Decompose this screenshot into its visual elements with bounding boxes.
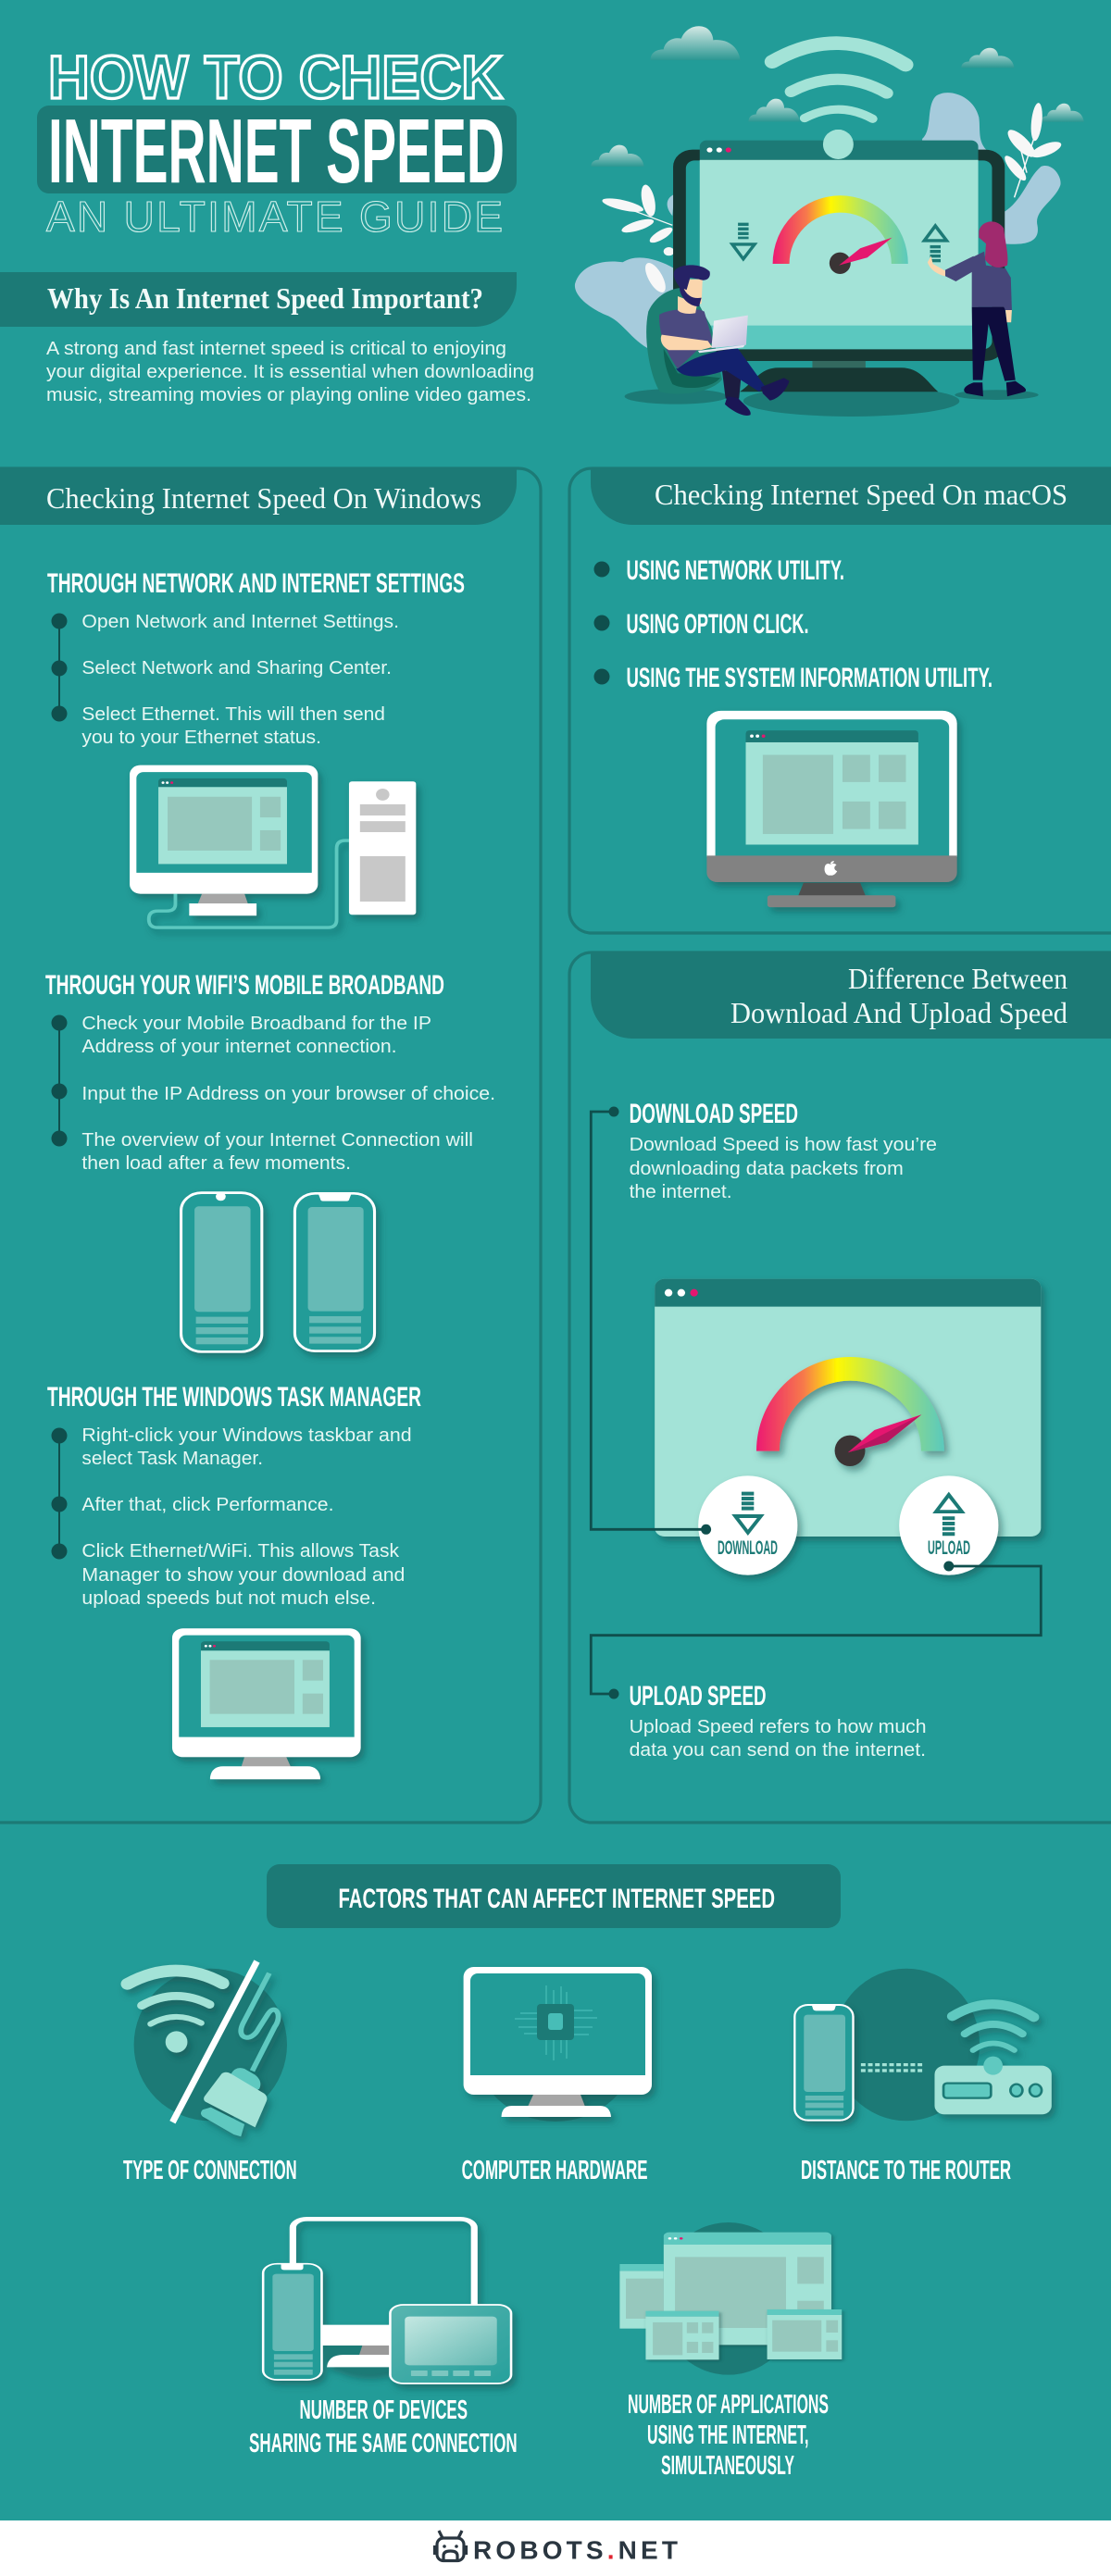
method 1 steps bbox=[81, 611, 399, 748]
footer bar bbox=[0, 2520, 1111, 2576]
upload arrow bbox=[932, 1492, 966, 1536]
method 2 steps: Address of your internet connection. bbox=[81, 1036, 397, 1057]
panel heading: Checking Internet Speed On Windows bbox=[46, 481, 481, 515]
label: TYPE OF CONNECTION bbox=[123, 2156, 297, 2185]
method 2 steps: Check your Mobile Broadband for the IP bbox=[81, 1013, 431, 1034]
logo wordmark: ROBOTS.NET bbox=[473, 2536, 678, 2564]
man with laptop bbox=[646, 265, 790, 416]
method 3 heading: THROUGH THE WINDOWS TASK MANAGER bbox=[47, 1382, 421, 1412]
label: COMPUTER HARDWARE bbox=[462, 2156, 648, 2185]
icon: stacked app windows bbox=[619, 2222, 842, 2375]
upload speed text: Upload Speed refers to how much bbox=[630, 1716, 927, 1737]
panel: checking speed on windows bbox=[0, 468, 541, 1823]
title bbox=[37, 43, 517, 241]
panel header band bbox=[0, 468, 517, 525]
download badge bbox=[698, 1475, 797, 1575]
ground shadows bbox=[625, 386, 1039, 417]
clouds bbox=[591, 26, 1084, 167]
method 3 steps: upload speeds but not much else. bbox=[81, 1587, 376, 1609]
intro paragraph: your digital experience. It is essential when downloading bbox=[46, 361, 534, 382]
icon: wifi versus cable bbox=[128, 1961, 287, 2136]
download speed heading: DOWNLOAD SPEED bbox=[630, 1099, 798, 1129]
download speed text: Download Speed is how fast you’re bbox=[630, 1134, 937, 1155]
intro paragraph: A strong and fast internet speed is critical to enjoying bbox=[46, 338, 506, 359]
macos methods list: USING OPTION CLICK. bbox=[626, 609, 809, 640]
method 1 timeline dots bbox=[52, 613, 67, 722]
speed gauge bbox=[773, 195, 908, 274]
title pill bbox=[37, 106, 517, 193]
label: NUMBER OF DEVICES bbox=[300, 2396, 468, 2425]
label: USING THE INTERNET, bbox=[647, 2420, 809, 2450]
speed gauge bbox=[756, 1357, 944, 1466]
panel: checking speed on macos bbox=[569, 468, 1111, 933]
wifi symbol bbox=[772, 44, 905, 159]
upload label: UPLOAD bbox=[928, 1537, 970, 1559]
method 1 heading: THROUGH NETWORK AND INTERNET SETTINGS bbox=[47, 568, 465, 599]
method 1 steps: you to your Ethernet status. bbox=[81, 727, 321, 748]
monitor bbox=[673, 130, 1005, 392]
upload speed text: data you can send on the internet. bbox=[630, 1739, 926, 1761]
heading text: Why Is An Internet Speed Important? bbox=[47, 281, 483, 315]
icon: robot logo bbox=[435, 2531, 467, 2561]
label: SIMULTANEOUSLY bbox=[661, 2451, 794, 2481]
factor: distance to the router bbox=[794, 1969, 1052, 2185]
upload speed text bbox=[630, 1716, 927, 1761]
woman pointing at gauge bbox=[928, 221, 1026, 396]
connector: download bbox=[591, 1107, 711, 1535]
download speed text: the internet. bbox=[630, 1181, 732, 1202]
macos methods list: USING NETWORK UTILITY. bbox=[626, 555, 844, 586]
blue foliage bbox=[575, 93, 1061, 350]
method 2 timeline dots bbox=[52, 1014, 67, 1146]
intro paragraph: music, streaming movies or playing online video games. bbox=[46, 384, 531, 405]
download arrow icon bbox=[730, 223, 758, 262]
upload speed heading: UPLOAD SPEED bbox=[630, 1681, 767, 1711]
panel header band bbox=[591, 952, 1111, 1039]
section heading: factors: FACTORS THAT CAN AFFECT INTERNET SPEED bbox=[339, 1884, 775, 1914]
label: SHARING THE SAME CONNECTION bbox=[249, 2429, 518, 2458]
panel: download vs upload speed bbox=[569, 952, 1111, 1823]
method 3 steps bbox=[81, 1425, 412, 1609]
factor: computer hardware bbox=[462, 1967, 652, 2185]
method 2 steps bbox=[81, 1013, 495, 1174]
method 1 steps: Select Ethernet. This will then send bbox=[81, 703, 385, 725]
intro paragraph bbox=[46, 338, 534, 405]
section heading: factors bbox=[267, 1864, 841, 1928]
macos methods list bbox=[626, 555, 992, 693]
speed test browser window bbox=[655, 1279, 1041, 1537]
panel heading: Download And Upload Speed bbox=[730, 996, 1067, 1029]
section: why speed is important bbox=[0, 272, 534, 405]
icon: two smartphones bbox=[181, 1192, 375, 1351]
icon: desktop monitor bbox=[172, 1628, 361, 1779]
hero illustration: monitor with speed gauge and two people bbox=[575, 26, 1084, 417]
label bbox=[628, 2390, 829, 2481]
download arrow bbox=[731, 1492, 765, 1536]
method 3 steps: Manager to show your download and bbox=[81, 1564, 405, 1586]
upload arrow icon bbox=[921, 223, 950, 262]
method 3 steps: Click Ethernet/WiFi. This allows Task bbox=[81, 1540, 400, 1562]
upload badge bbox=[899, 1475, 998, 1575]
download label: DOWNLOAD bbox=[718, 1537, 778, 1559]
bullet dots bbox=[594, 561, 609, 685]
factor: number of applications bbox=[619, 2222, 842, 2481]
factor: type of connection bbox=[123, 1961, 297, 2185]
method 3 steps: select Task Manager. bbox=[81, 1448, 263, 1469]
download speed text: downloading data packets from bbox=[630, 1158, 904, 1179]
circuit traces bbox=[515, 1985, 597, 2060]
method 1 steps: Select Network and Sharing Center. bbox=[81, 657, 392, 678]
icon: phone and router bbox=[794, 1969, 1052, 2121]
download speed text bbox=[630, 1134, 937, 1202]
panel heading: Difference Between bbox=[848, 962, 1067, 995]
label bbox=[249, 2396, 518, 2458]
panel header band bbox=[591, 468, 1111, 525]
white leaves bbox=[601, 103, 1064, 294]
method 3 steps: Right-click your Windows taskbar and bbox=[81, 1425, 412, 1446]
icon: desktop computer with tower bbox=[130, 765, 416, 927]
title line: how to check: HOW TO CHECK bbox=[48, 43, 503, 111]
method 1 steps: Open Network and Internet Settings. bbox=[81, 611, 399, 632]
icon: imac bbox=[706, 711, 957, 907]
method 3 timeline dots bbox=[52, 1427, 67, 1559]
method 2 steps: then load after a few moments. bbox=[81, 1152, 351, 1174]
panel frame bbox=[0, 468, 541, 1823]
connector: upload bbox=[591, 1561, 1041, 1699]
title line: an ultimate guide: AN ULTIMATE GUIDE bbox=[46, 193, 503, 241]
method 2 heading: THROUGH YOUR WIFI’S MOBILE BROADBAND bbox=[45, 970, 444, 1001]
icon: monitor with chip bbox=[464, 1967, 652, 2122]
panel frame bbox=[569, 952, 1111, 1823]
method 3 steps: After that, click Performance. bbox=[81, 1494, 334, 1515]
method 2 steps: The overview of your Internet Connection will bbox=[81, 1129, 473, 1151]
method 2 steps: Input the IP Address on your browser of choice. bbox=[81, 1083, 495, 1104]
label: NUMBER OF APPLICATIONS bbox=[628, 2390, 829, 2420]
panel frame bbox=[569, 468, 1111, 933]
icon: monitor, phone and tablet bbox=[263, 2219, 511, 2383]
panel heading: Checking Internet Speed On macOS bbox=[655, 478, 1067, 511]
panel heading bbox=[730, 962, 1067, 1029]
factor: number of devices bbox=[249, 2219, 518, 2458]
heading band bbox=[0, 272, 517, 327]
title line: internet speed: INTERNET SPEED bbox=[48, 100, 505, 202]
